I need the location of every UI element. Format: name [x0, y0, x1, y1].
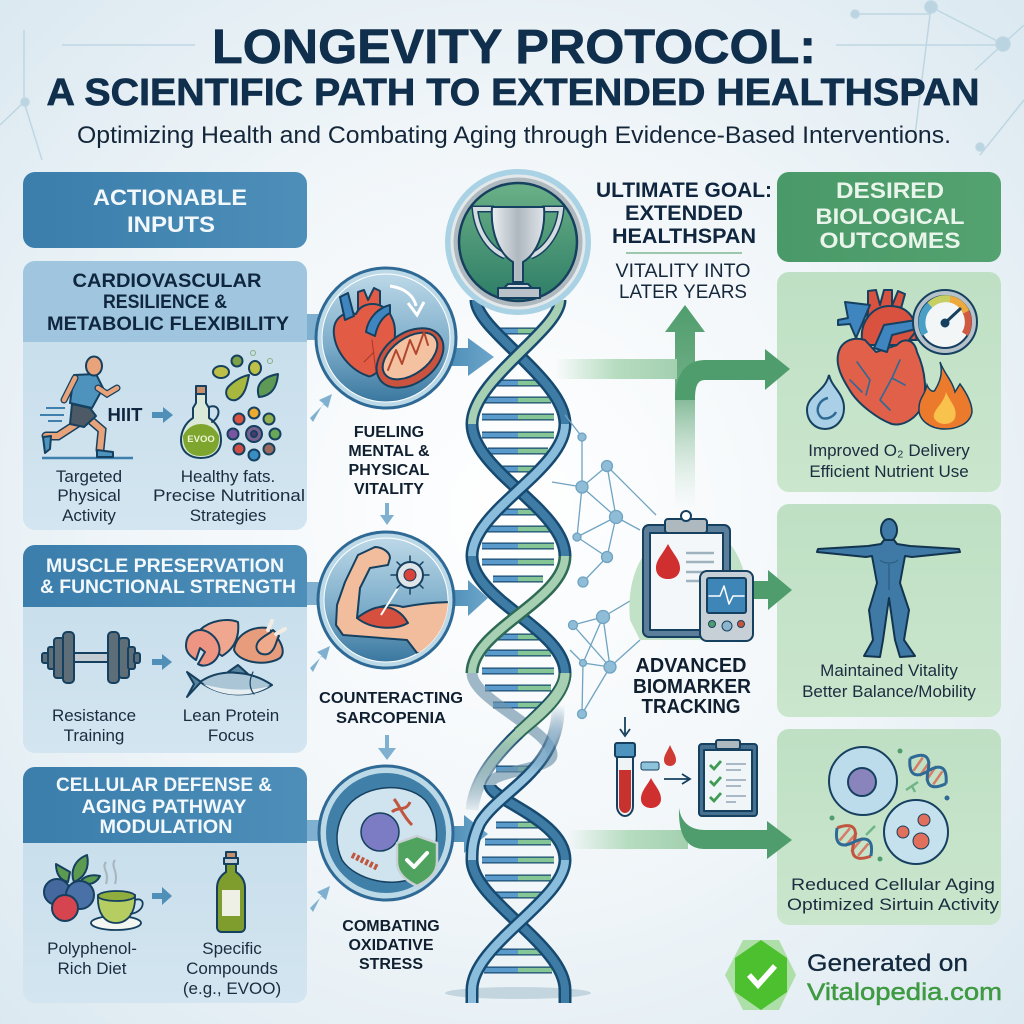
label: maintained vitality [802, 661, 976, 701]
icon: flame [919, 362, 972, 429]
icon: salmon steak [186, 620, 238, 666]
text: advanced biomarker tracking: BIOMARKER [633, 676, 752, 698]
text: ultimate goal: HEALTHSPAN [612, 225, 756, 248]
icon: small DNA top right [904, 750, 952, 792]
panel heading: muscle [40, 556, 296, 598]
label: polyphenol diet: Rich Diet [58, 959, 127, 978]
DNA helix [445, 300, 591, 1003]
decorative network: top corners [0, 1, 1024, 160]
shield [397, 836, 437, 886]
checklist [699, 740, 757, 816]
arrow: diet to compounds [152, 887, 172, 905]
panel heading: muscle: MUSCLE PRESERVATION [46, 556, 284, 577]
label: healthy fats [153, 467, 305, 525]
text: fueling vitality: VITALITY [354, 481, 424, 498]
label: specific compounds [183, 939, 281, 998]
label: targeted physical activity: Targeted [56, 467, 122, 486]
icon: gauge [913, 290, 977, 354]
panel heading: cardiovascular [47, 271, 289, 335]
icon: runner [40, 356, 133, 458]
label: specific compounds: (e.g., EVOO) [183, 979, 281, 998]
label: healthy fats: Strategies [190, 506, 266, 525]
heading: desired outcomes: OUTCOMES [820, 228, 960, 253]
divider under goal [626, 252, 742, 254]
text: advanced biomarker tracking: ADVANCED [636, 655, 746, 677]
label: reduced cellular aging: Optimized Sirtuin Activity [787, 895, 1000, 914]
icon: nutrient dots [228, 408, 280, 460]
clipboard [643, 511, 730, 637]
text: combating oxidative stress [342, 918, 440, 973]
icon: human figure [817, 519, 960, 657]
text: advanced biomarker tracking [633, 655, 752, 718]
text: vitality into later years: LATER YEARS [619, 282, 747, 303]
label: polyphenol diet: Polyphenol- [47, 939, 137, 958]
logo badge: Generated on [807, 950, 968, 977]
text: combating oxidative stress: STRESS [359, 956, 423, 973]
label: targeted physical activity [56, 467, 122, 525]
label: targeted physical activity: Physical [57, 486, 121, 505]
panel heading: cardiovascular: METABOLIC FLEXIBILITY [47, 314, 289, 335]
heading: desired outcomes: DESIRED [836, 178, 944, 203]
heading: desired outcomes: BIOLOGICAL [816, 204, 964, 229]
label: healthy fats: Precise Nutritional [153, 486, 305, 505]
icon: healthy fats cluster [213, 350, 278, 400]
arrow: training to protein [152, 654, 172, 670]
test tube [615, 743, 635, 816]
panel heading: cardiovascular: CARDIOVASCULAR [72, 271, 262, 292]
panel heading: cellular: CELLULAR DEFENSE & [56, 775, 272, 796]
panel: cellular defense [23, 767, 307, 1003]
text: ultimate goal [596, 179, 772, 248]
label: reduced cellular aging [787, 875, 1000, 914]
arrow: DNA to oxygen outcome [555, 349, 790, 400]
arrow: up to ultimate goal [665, 305, 705, 510]
label: polyphenol diet [47, 939, 137, 978]
icon: flexed arm circle [318, 532, 455, 668]
label: healthy fats: Healthy fats. [181, 467, 275, 486]
heading: actionable inputs [23, 172, 307, 248]
panel: muscle preservation [23, 545, 307, 753]
DNA base shadow [445, 987, 591, 999]
text: combating oxidative stress: OXIDATIVE [348, 937, 434, 954]
label: maintained vitality: Maintained Vitality [820, 661, 958, 680]
label: resistance training [52, 706, 136, 745]
DNA back strand, dark [472, 300, 565, 1003]
label: specific compounds: Specific [202, 939, 262, 958]
label: targeted physical activity: Activity [62, 506, 116, 525]
curved arrow [390, 286, 424, 315]
icon: trophy medallion [445, 169, 591, 315]
logo hexagons [725, 940, 796, 1010]
arrow: DNA to cellular outcome [568, 808, 792, 859]
panel heading: cellular [56, 775, 272, 838]
target cell [391, 556, 429, 594]
heading: desired outcomes [777, 172, 1001, 262]
icon: EVOO bottle: EVOO [187, 434, 215, 445]
icon: fish [187, 665, 272, 697]
text: fueling vitality: FUELING [354, 424, 424, 441]
panel: cellular outcome [777, 729, 1001, 925]
icon: heart and mitochondrion circle [316, 268, 456, 408]
icon: small DNA bottom left [830, 820, 878, 864]
decorative green particles [830, 748, 950, 862]
DNA front strand, light [472, 300, 565, 1003]
text: fueling vitality: PHYSICAL [349, 462, 430, 479]
label: resistance training: Training [64, 726, 124, 745]
panel: oxygen outcome [777, 272, 1001, 492]
heading: actionable inputs: ACTIONABLE [93, 185, 247, 210]
text: counteracting sarcopenia: SARCOPENIA [336, 710, 446, 727]
arrows: circles to DNA [450, 338, 494, 853]
label: lean protein: Focus [208, 726, 254, 745]
logo badge [725, 940, 1002, 1010]
icon: berries [44, 855, 100, 921]
text: ultimate goal: ULTIMATE GOAL: [596, 179, 772, 202]
icon: olive oil bottle [217, 852, 245, 932]
label: reduced cellular aging: Reduced Cellular Aging [791, 875, 995, 894]
panel heading: cardiovascular: RESILIENCE & [103, 292, 227, 313]
label: HIIT: HIIT [108, 405, 143, 425]
heart [334, 288, 395, 376]
label: specific compounds: Compounds [186, 959, 278, 978]
trophy cup [475, 207, 561, 298]
icon: biomarker clipboard and monitor [629, 511, 753, 641]
network of nodes [552, 415, 656, 718]
panel: cardiovascular resilience [23, 261, 307, 530]
label: lean protein: Lean Protein [183, 706, 279, 725]
panel: vitality outcome [777, 504, 1001, 717]
title: LONGEVITY PROTOCOL: [212, 21, 816, 74]
blood drop [656, 544, 680, 579]
title: A SCIENTIFIC PATH TO EXTENDED HEALTHSPAN [46, 72, 980, 114]
text: combating oxidative stress: COMBATING [342, 918, 440, 935]
text: advanced biomarker tracking: TRACKING [642, 696, 740, 718]
icon: cells [829, 747, 948, 864]
icon: blood test and checklist [615, 717, 757, 816]
arrow: biomarker to vitality outcome [750, 570, 792, 610]
logo badge: Vitalopedia.com [807, 979, 1002, 1006]
label: lean protein [183, 706, 279, 745]
icon: large heart [838, 290, 925, 424]
label: improved oxygen delivery: Improved O₂ Delivery [808, 441, 970, 460]
icon: dumbbell [42, 632, 140, 683]
icon: cell and shield circle [319, 766, 453, 900]
icon: EVOO bottle [181, 386, 221, 458]
icon: water drop [807, 375, 844, 429]
text: counteracting sarcopenia: COUNTERACTING [319, 690, 463, 707]
title [46, 21, 980, 114]
label: maintained vitality: Better Balance/Mobility [802, 682, 976, 701]
text: fueling vitality [348, 424, 430, 498]
text: ultimate goal: EXTENDED [625, 202, 743, 225]
text: vitality into later years [616, 261, 750, 303]
flexed arm [336, 547, 455, 655]
muscle pointer [381, 588, 398, 615]
label: improved oxygen delivery: Efficient Nutrient Use [809, 462, 969, 481]
monitor [700, 571, 753, 641]
text: fueling vitality: MENTAL & [348, 443, 430, 460]
arrows: inputs to circles [307, 314, 396, 912]
text: vitality into later years: VITALITY INTO [616, 261, 750, 282]
label: improved oxygen delivery [808, 441, 970, 481]
panel heading: muscle: & FUNCTIONAL STRENGTH [40, 577, 296, 598]
text: counteracting sarcopenia [319, 690, 463, 727]
icon: chicken [234, 621, 285, 663]
arrow: HIIT to nutrition [152, 407, 173, 423]
mitochondrion [365, 316, 455, 400]
subtitle: Optimizing Health and Combating Aging through Evidence-Based Interventions. [77, 122, 951, 149]
heading: actionable inputs: INPUTS [127, 212, 215, 237]
icon: tea cup [91, 860, 143, 930]
DNA rungs [482, 331, 554, 970]
panel heading: cellular: AGING PATHWAY [82, 797, 247, 818]
label: resistance training: Resistance [52, 706, 136, 725]
panel heading: cellular: MODULATION [100, 817, 232, 838]
